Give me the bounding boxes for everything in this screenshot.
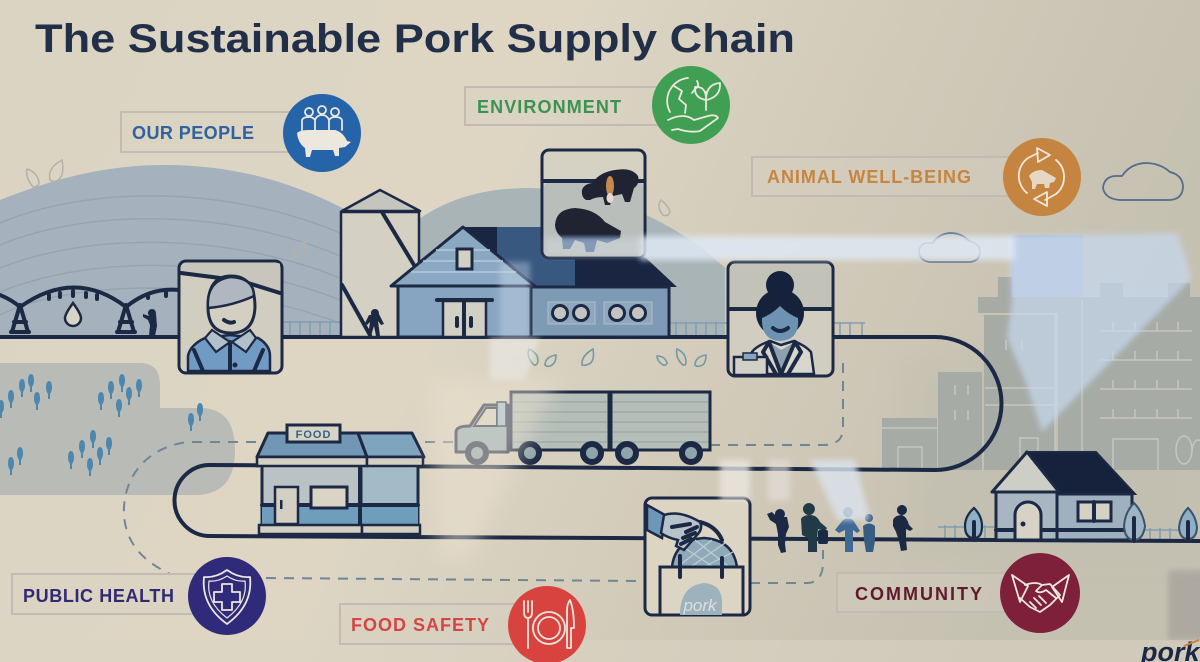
house door (1015, 502, 1041, 540)
hill with irrigated field (0, 165, 350, 337)
window reflection over city (1007, 233, 1192, 432)
barn doors (437, 300, 492, 337)
farmer shirt (188, 335, 270, 371)
icon: lower pig (555, 208, 621, 252)
person near irrigation (143, 309, 157, 336)
truck (456, 392, 710, 462)
title: The Sustainable Pork Supply Chain (35, 17, 795, 61)
house (992, 452, 1135, 540)
label: environment: ENVIRONMENT (477, 97, 621, 117)
store door (275, 487, 298, 524)
label: our people: OUR PEOPLE (132, 123, 254, 143)
people in community (767, 503, 913, 553)
barn vents (548, 302, 652, 324)
farmer head (208, 276, 255, 333)
supply chain road (0, 337, 1200, 541)
store roof (257, 433, 367, 457)
field with trees (0, 363, 235, 495)
label: our people (121, 94, 361, 172)
clouds (919, 163, 1183, 262)
trees (965, 503, 1197, 541)
store window (311, 487, 347, 508)
clipboard (734, 353, 767, 375)
cab (456, 405, 508, 452)
label: community: COMMUNITY (855, 584, 982, 604)
label: public health (12, 557, 266, 635)
wheels (468, 444, 700, 462)
panel: farmer (179, 261, 282, 373)
pork logo: pork (682, 596, 718, 615)
panel: pigs (542, 150, 645, 258)
bag (660, 567, 743, 615)
panel: shopping bag (645, 498, 750, 615)
food sign (287, 425, 340, 442)
label: food safety: FOOD SAFETY (351, 615, 489, 635)
fences (283, 321, 1180, 541)
label: animal well-being (752, 138, 1081, 216)
label: public health: PUBLIC HEALTH (23, 586, 174, 606)
vet head (756, 271, 804, 341)
trailers (511, 392, 609, 450)
house window (1078, 502, 1111, 521)
store base (259, 525, 362, 534)
ground leaves (528, 349, 706, 366)
food store (257, 425, 424, 534)
silo (341, 190, 420, 337)
label: community (837, 553, 1080, 633)
meat dome (672, 538, 737, 567)
shadow patches (0, 330, 1200, 662)
barn window (457, 249, 472, 269)
icon: water drop (65, 303, 81, 326)
label: environment (465, 66, 730, 144)
dashed route (124, 355, 843, 583)
panel: veterinarian (728, 262, 833, 376)
food sign: FOOD (296, 429, 331, 441)
vet coat (748, 341, 814, 374)
label: animal well-being: ANIMAL WELL-BEING (767, 167, 971, 187)
barn (391, 227, 677, 337)
label: food safety (340, 586, 586, 662)
city skyline (882, 235, 1200, 470)
irrigation system (0, 288, 179, 332)
decorative leaves (27, 160, 670, 257)
bag handle and hand (647, 505, 722, 577)
hill behind barn (415, 188, 725, 337)
icon: upper pig (582, 169, 638, 205)
